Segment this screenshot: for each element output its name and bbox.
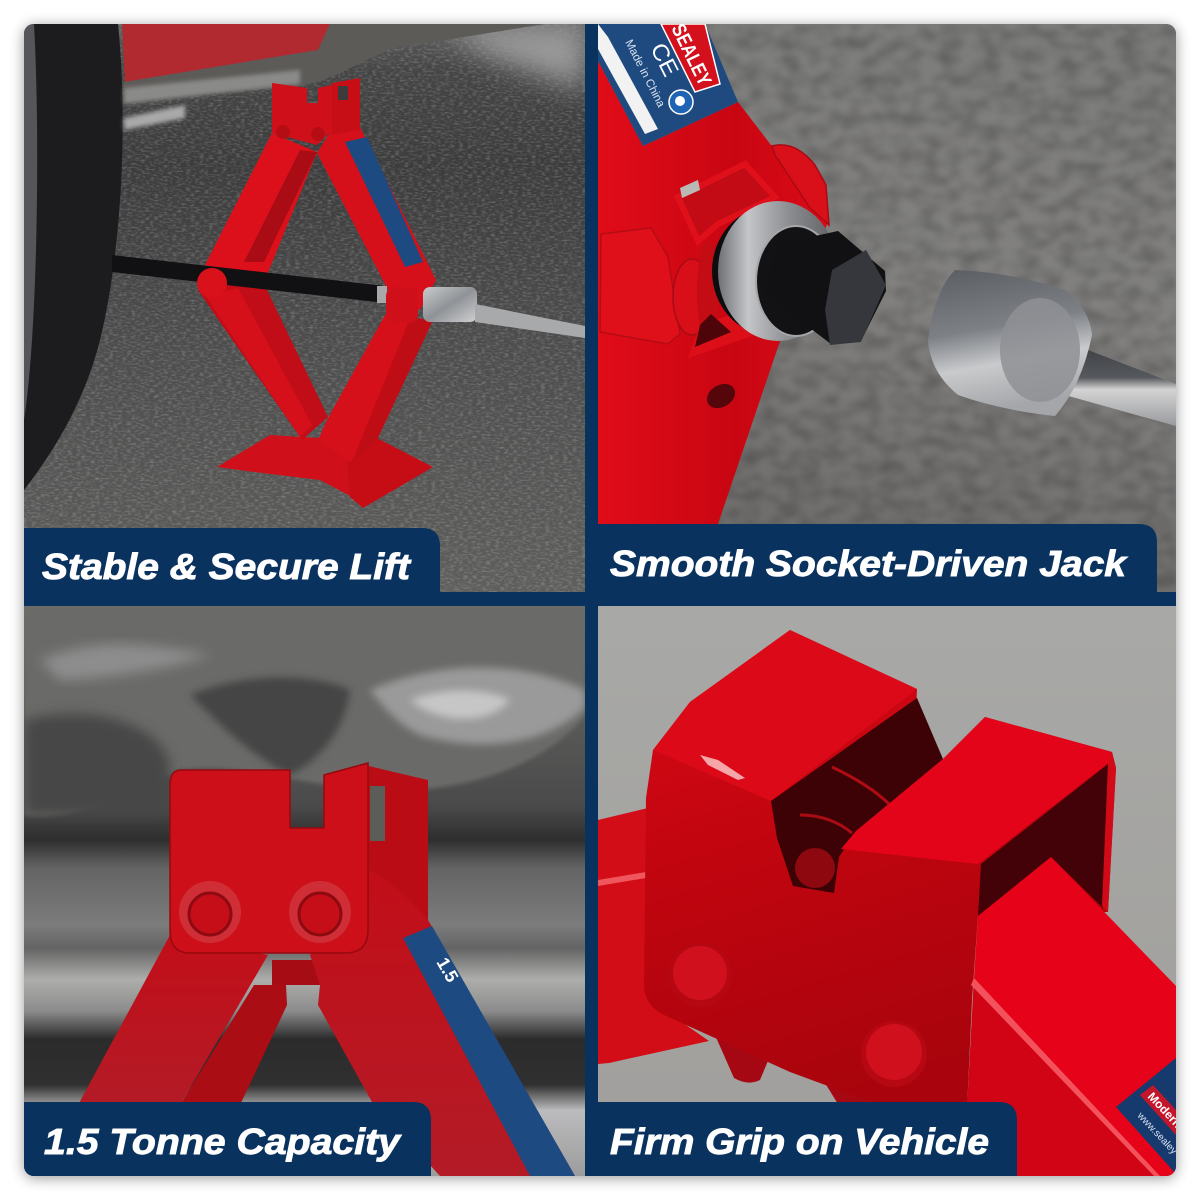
lower left arm xyxy=(198,272,328,440)
chassis underbody xyxy=(24,638,585,818)
base plates xyxy=(217,435,352,497)
socket tool xyxy=(928,270,1176,426)
manual icon xyxy=(669,90,693,114)
rating label xyxy=(598,21,738,146)
panel: smooth socket driven jack xyxy=(598,21,1176,592)
hex bolt xyxy=(812,231,886,343)
drips xyxy=(715,1035,770,1083)
caption: stable and secure lift: Stable & Secure Lift xyxy=(42,546,412,587)
label corner: www.sealey xyxy=(1134,1110,1179,1157)
right pivot xyxy=(386,287,418,323)
left block xyxy=(600,228,680,344)
dark gouge xyxy=(190,678,350,775)
jack body xyxy=(598,61,828,524)
saddle front face xyxy=(644,630,1116,1110)
slot left xyxy=(771,698,943,893)
rating label: SEALEY xyxy=(667,21,715,90)
jack legs xyxy=(78,935,268,1105)
ear pivots xyxy=(672,258,700,336)
arm xyxy=(967,857,1176,1176)
o ring xyxy=(712,214,744,328)
rivets xyxy=(179,881,241,943)
top face right xyxy=(841,717,1112,864)
caption: firm grip on vehicle: Firm Grip on Vehicle xyxy=(610,1121,989,1162)
rating strip xyxy=(403,926,575,1176)
white strip xyxy=(598,24,658,134)
left pivot xyxy=(197,268,227,298)
rating strip xyxy=(345,137,423,267)
rating strip: 1.5 xyxy=(433,954,462,986)
rear saddle plate xyxy=(332,78,360,135)
side wall right xyxy=(1102,752,1116,912)
front saddle plate xyxy=(272,83,332,145)
brand stamp xyxy=(661,24,720,92)
jack xyxy=(112,78,585,508)
tool rod xyxy=(1065,345,1176,426)
caption: 1.5 tonne capacity xyxy=(24,1102,431,1176)
label corner: Modern xyxy=(1145,1089,1185,1131)
saddle front xyxy=(170,763,368,953)
wrench xyxy=(475,304,585,338)
panel: firm grip on vehicle xyxy=(598,606,1185,1176)
tyre xyxy=(24,24,123,490)
lower window xyxy=(688,316,754,358)
panel: stable and secure lift xyxy=(24,24,585,592)
outer ear xyxy=(772,145,829,225)
jack rear plate xyxy=(360,764,428,930)
caption: stable and secure lift xyxy=(24,528,440,592)
tool cup xyxy=(928,270,1092,416)
threaded rod xyxy=(112,255,385,303)
top face left xyxy=(653,630,917,801)
rating label: CE xyxy=(646,38,684,81)
side bar xyxy=(598,808,709,1064)
rating label: Made in China xyxy=(622,38,667,110)
caption: firm grip on vehicle xyxy=(585,1102,1017,1176)
caption: 1.5 tonne capacity: 1.5 Tonne Capacity xyxy=(44,1121,402,1162)
caption: smooth socket driven jack xyxy=(585,524,1157,592)
pale floor top right xyxy=(440,24,585,90)
upper left arm xyxy=(205,133,317,275)
socket collar xyxy=(718,201,838,341)
bright weld xyxy=(370,668,585,744)
caption: smooth socket driven jack: Smooth Socket-Driven Jack xyxy=(610,543,1128,584)
hole xyxy=(706,384,736,408)
label corner xyxy=(1116,1058,1185,1174)
socket xyxy=(423,287,477,322)
rivets xyxy=(668,943,732,1007)
lower right arm xyxy=(318,315,433,462)
upper right arm xyxy=(317,127,436,310)
panel: 1.5 tonne capacity xyxy=(24,606,585,1176)
bracket window xyxy=(678,164,775,241)
slot right xyxy=(978,764,1108,916)
car body xyxy=(122,24,545,130)
